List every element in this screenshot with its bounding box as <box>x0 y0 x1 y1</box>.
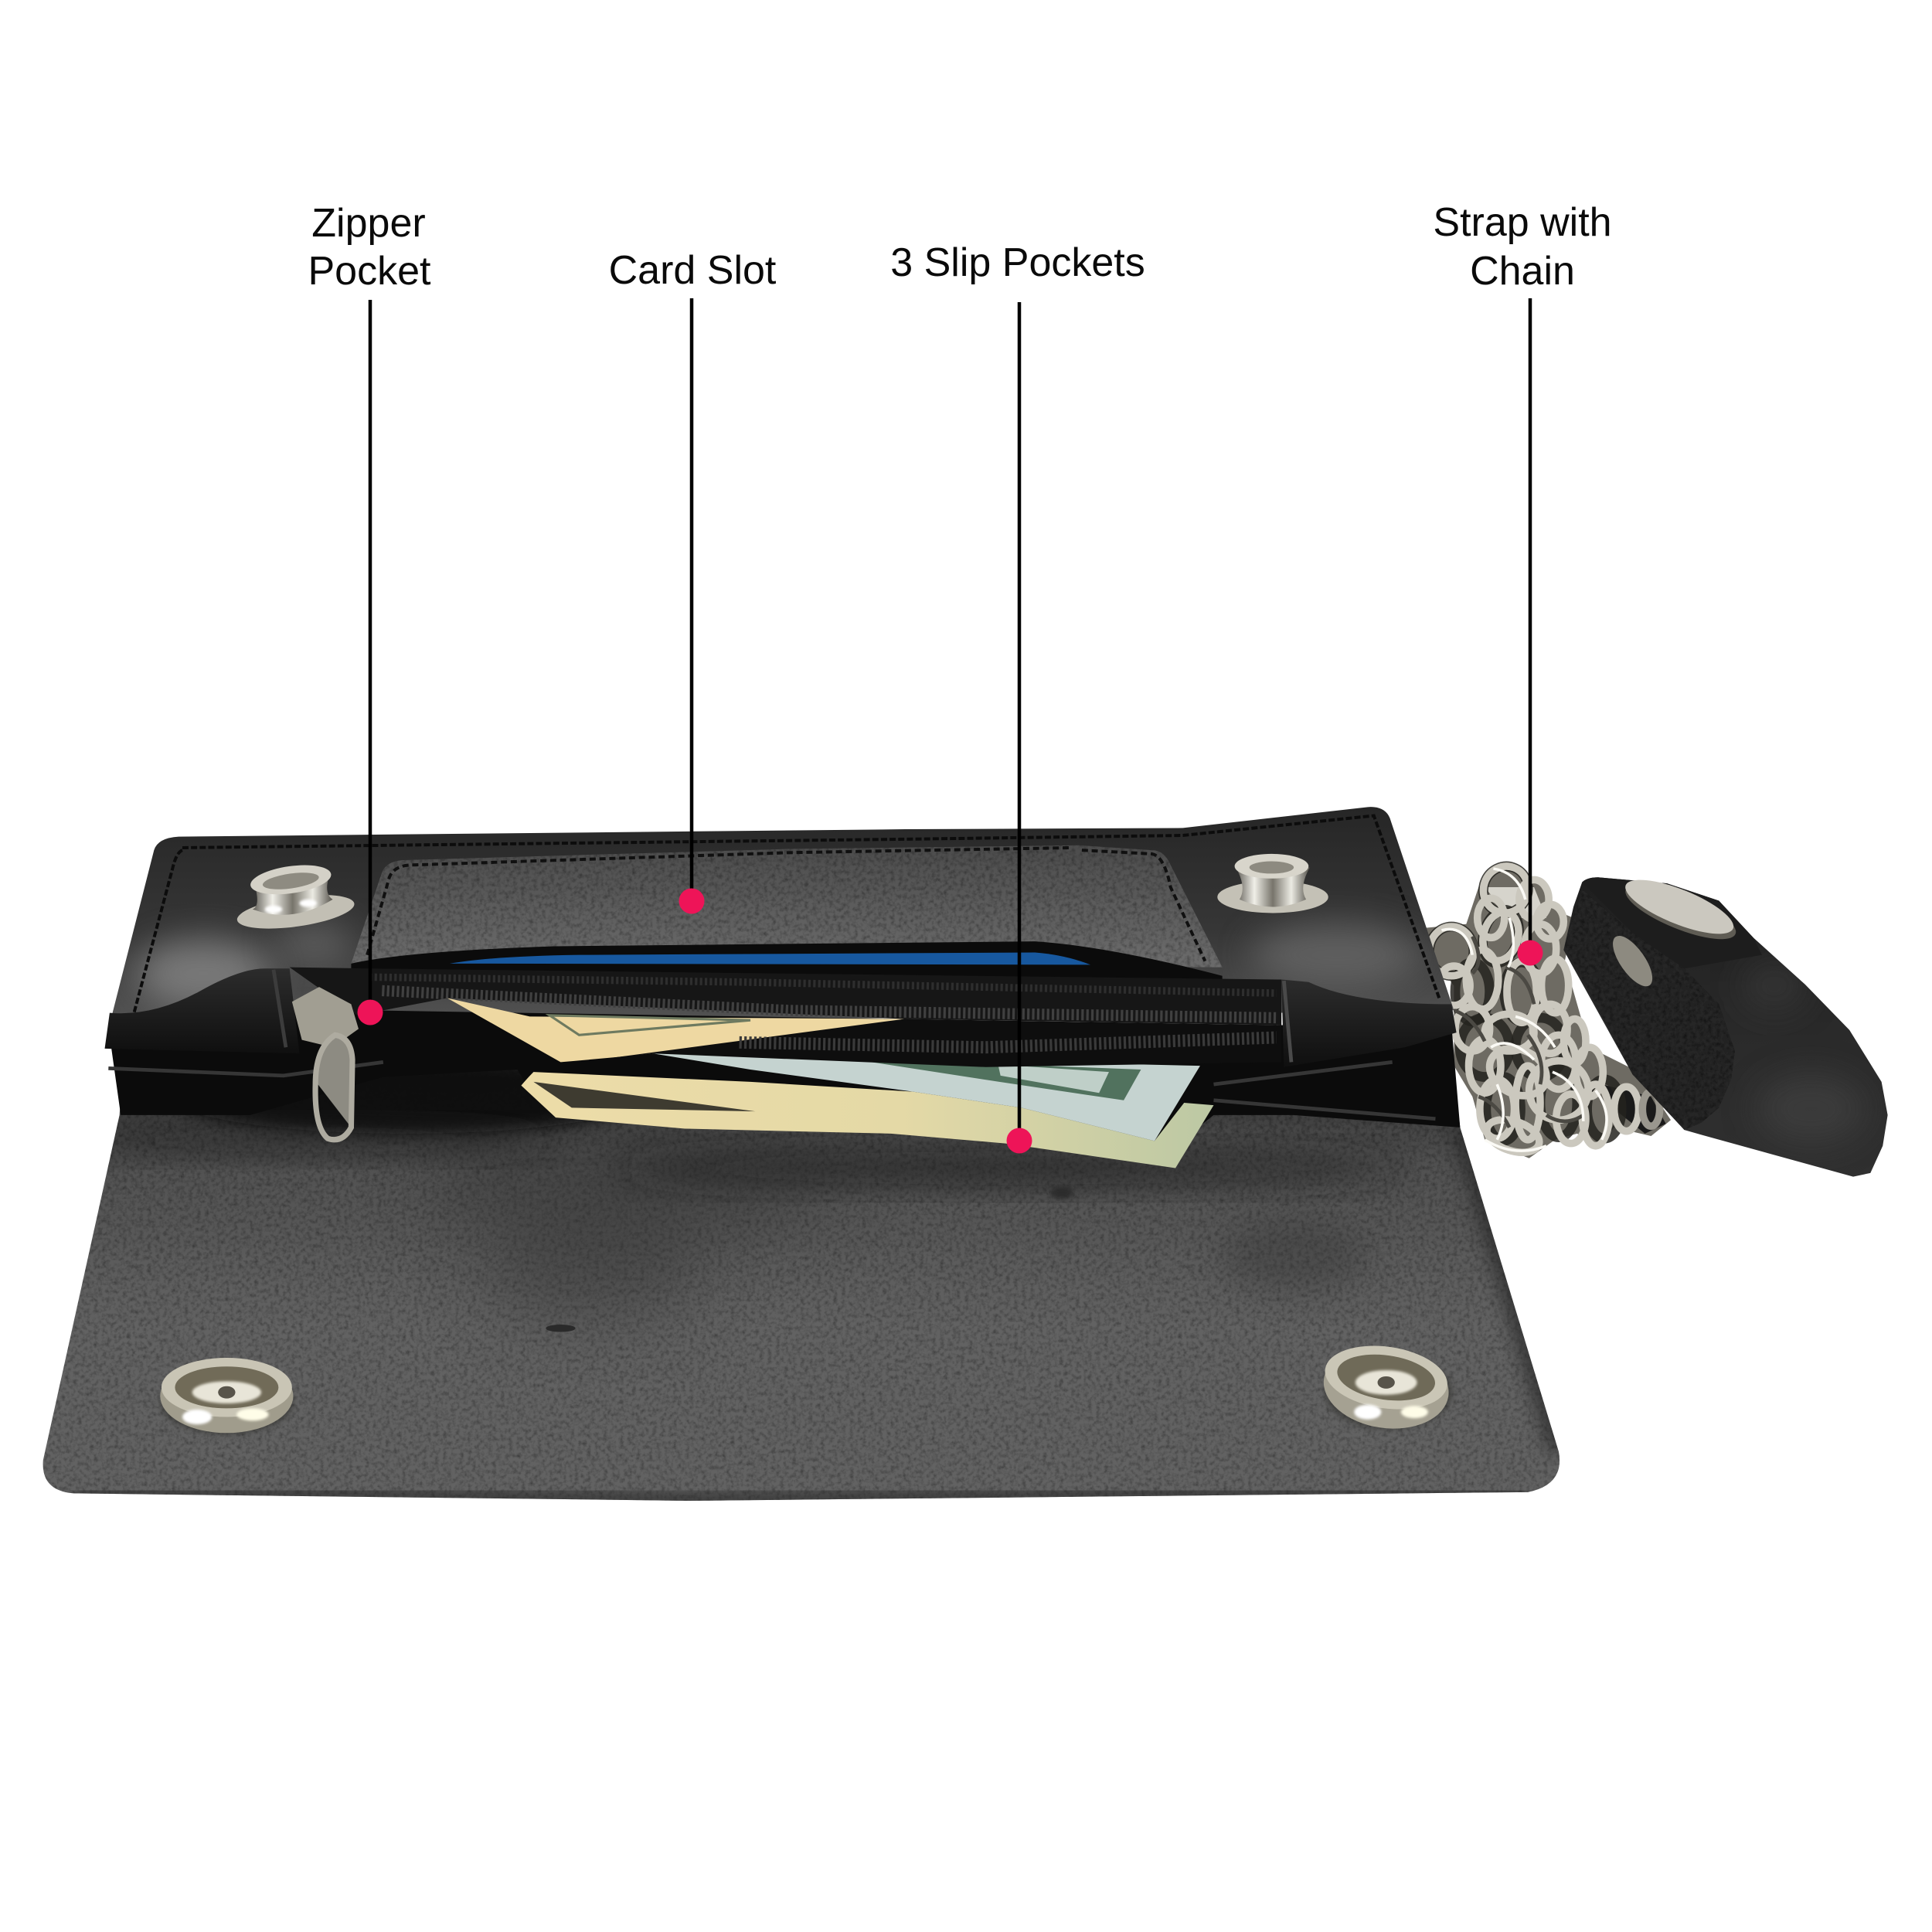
zipper pull <box>292 987 359 1140</box>
snap: bottom right <box>1318 1338 1454 1437</box>
card slot panel <box>351 845 1223 986</box>
label: Strap with Chain: Chain <box>1470 249 1575 294</box>
label: Strap with Chain: Strap with <box>1433 200 1612 245</box>
card slot opening with blue card <box>351 941 1223 986</box>
label: 3 Slip Pockets: 3 Slip Pockets <box>890 240 1145 285</box>
strap with snap <box>1563 869 1888 1177</box>
leather end: right <box>1281 980 1457 1067</box>
zipper: upper tape <box>290 968 1281 1026</box>
back panel (black leather) <box>108 807 1454 1029</box>
cash: folded bills <box>447 998 1213 1168</box>
tan bill in zipper pocket <box>447 998 904 1062</box>
lower flap (suede interior) <box>43 1060 1560 1501</box>
label: Card Slot: Card Slot <box>609 248 777 293</box>
label: Zipper Pocket: Pocket <box>308 249 431 294</box>
cream and green bill <box>521 1072 1213 1168</box>
label: Card Slot <box>609 248 777 913</box>
snap: top left <box>235 861 356 934</box>
wallet photo illustration <box>43 807 1888 1501</box>
label: Zipper Pocket <box>308 201 431 1025</box>
label: Strap with Chain <box>1433 200 1612 966</box>
zipper: lower tape <box>579 1019 1281 1067</box>
chain <box>1426 860 1671 1158</box>
upper strap tab <box>1582 877 1762 968</box>
pale blue bill <box>653 1053 1200 1141</box>
stitching <box>133 815 1439 1016</box>
snap: top right <box>1217 854 1328 913</box>
label: Zipper Pocket: Zipper <box>311 201 426 246</box>
snap: bottom left <box>160 1358 293 1434</box>
inner pockets (dark layers) <box>108 1010 1460 1146</box>
strap snap <box>1619 873 1742 950</box>
strap suede underside <box>1565 889 1735 1130</box>
leather end: left <box>105 968 299 1053</box>
label: 3 Slip Pockets <box>890 240 1145 1153</box>
